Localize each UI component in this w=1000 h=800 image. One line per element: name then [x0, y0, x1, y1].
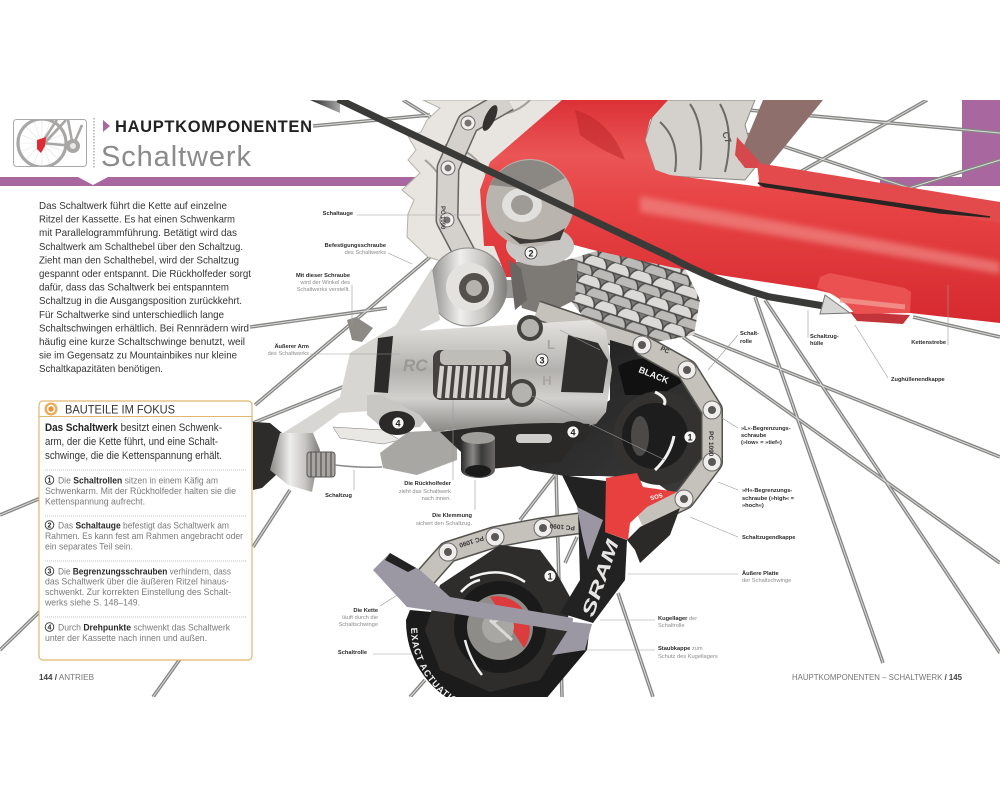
- number badges: 2: [528, 248, 534, 258]
- cage plates: SOS: [649, 491, 663, 500]
- panel: Bauteile im Fokus: [39, 401, 252, 660]
- number badges: 1: [687, 432, 693, 442]
- number badges: 4: [395, 418, 401, 428]
- item 4: 4: [48, 625, 52, 632]
- labels left of illustration: [268, 211, 946, 656]
- intro text block: häufig eine kurze Schaltschwinge benutzt, weil: [39, 337, 245, 348]
- labels right of illustration: Staubkappe zum: [658, 646, 703, 652]
- item 3: werks siehe S. 148–149.: [44, 598, 140, 608]
- panel intro: arm, der die Kette führt, und eine Schalt-: [45, 436, 218, 448]
- limit screws: [517, 315, 543, 341]
- item 2: 2: [48, 523, 52, 530]
- labels right of illustration: der Schaltschwinge: [742, 578, 791, 584]
- labels left of illustration: Befestigungsschraube: [325, 243, 386, 249]
- intro text block: sie im Gegensatz zu Mountainbikes nur kleine: [39, 351, 237, 362]
- number badges: 4: [570, 427, 576, 437]
- labels right of illustration: »L«-Begrenzungs-: [741, 426, 791, 432]
- labels left of illustration: zieht das Schaltwerk: [399, 489, 451, 495]
- labels right of illustration: Schalt-: [740, 331, 759, 337]
- footer left: 144 / ANTRIEB: [39, 673, 94, 682]
- heading: HAUPTKOMPONENTEN: [115, 118, 312, 136]
- upper red stay: [757, 163, 1000, 225]
- cage plates: SRAM: [578, 536, 623, 619]
- lower cage pulley: [406, 545, 590, 705]
- icon: bicycle locator: [14, 118, 86, 168]
- labels right of illustration: [658, 331, 945, 660]
- labels left of illustration: Mit dieser Schraube: [296, 273, 350, 279]
- hanger area shadow: [516, 260, 578, 312]
- lower chain: PC 1090: [707, 431, 714, 457]
- labels left of illustration: Schaltauge: [323, 211, 353, 217]
- item 4: Durch Drehpunkte schwenkt das Schaltwerk: [58, 622, 230, 632]
- item 1: Kettenspannung aufrecht.: [45, 496, 145, 506]
- item 2: Rahmen. Es kann fest am Rahmen angebracht oder: [45, 531, 243, 541]
- footer right: HAUPTKOMPONENTEN – SCHALTWERK / 145: [792, 673, 963, 682]
- dotted divider: [93, 118, 95, 168]
- parallelogram body: [374, 315, 612, 470]
- parallelogram body: RC: [403, 356, 428, 375]
- item 3: schwenkt. Zur korrekten Einstellung des Schalt-: [45, 587, 231, 597]
- labels left of illustration: des Schaltwerks: [345, 250, 386, 256]
- gear cable housing: [310, 99, 824, 306]
- cassette arcs: [424, 100, 531, 176]
- arrow marker: [103, 120, 110, 132]
- cable end cap on chainstay: [817, 273, 911, 324]
- item 3: Die Begrenzungsschrauben verhindern, dass: [58, 566, 231, 576]
- intro text block: dafür, dass das Schaltwerk bei entspanntem: [39, 283, 229, 294]
- labels left of illustration: Schaltzug: [325, 493, 353, 499]
- main illustration: bicycle rear derailleur: [0, 100, 1000, 697]
- panel intro: [45, 422, 222, 462]
- lower chain: PC 1090: [549, 522, 575, 531]
- intro text block: Schaltwerk am Schalthebel über den Schaltzug.: [39, 242, 243, 253]
- parallelogram body: L: [547, 337, 555, 352]
- small cassette sprockets: [560, 250, 700, 345]
- labels right of illustration: Schutz des Kugellagers: [658, 654, 718, 660]
- labels right of illustration: Zughüllenendkappe: [891, 377, 945, 383]
- main illustration: bicycle rear derailleur: C7: [720, 130, 733, 145]
- labels left of illustration: Die Klemmung: [432, 513, 473, 519]
- upper chain run behind body: [537, 310, 642, 345]
- lower chain: PC: [659, 345, 671, 356]
- barrel adjuster: [461, 432, 495, 478]
- big bolt washer: [429, 248, 527, 326]
- labels left of illustration: läuft durch die: [342, 615, 378, 621]
- item 1: Die Schaltrollen sitzen in einem Käfig am: [58, 476, 218, 486]
- dropout disc: [486, 159, 574, 266]
- text on pulley cage: EXACT ACTUATION: [411, 628, 456, 697]
- leader lines: [310, 215, 948, 654]
- intro text block: Schaltkapazitäten benötigen.: [39, 364, 163, 375]
- item 2: ein separates Teil sein.: [45, 542, 133, 552]
- cage plates: [373, 473, 680, 655]
- labels left of illustration: sichert den Schaltzug.: [416, 521, 472, 527]
- labels left of illustration: Schaltwerks verstellt.: [297, 287, 350, 293]
- icon: gear: [44, 402, 58, 416]
- labels left of illustration: des Schaltwerks: [268, 351, 309, 357]
- labels left of illustration: Die Kette: [353, 608, 378, 614]
- item 4: unter der Kassette nach innen und außen.: [45, 633, 207, 643]
- item 1: [45, 476, 236, 506]
- parallelogram body: H: [542, 373, 552, 388]
- seat stay tube: [738, 100, 823, 167]
- intro text block: Zieht man den Schalthebel, wird der Schaltzug: [39, 255, 239, 266]
- silver lobe and lower arm: [333, 392, 457, 475]
- return spring: [433, 350, 511, 400]
- lower chain: PC 1090: [458, 534, 484, 548]
- subtitle: Schaltwerk: [101, 141, 252, 173]
- intro text block: [39, 201, 251, 375]
- dark upper cage and pulley: [520, 340, 701, 492]
- labels right of illustration: hülle: [810, 341, 823, 347]
- panel intro: Das Schaltwerk besitzt einen Schwenk-: [45, 422, 222, 434]
- number badges: 3: [539, 355, 545, 365]
- labels right of illustration: »H«-Begrenzungs-: [742, 488, 792, 494]
- intro text block: mit Parallelogrammführung. Betätigt wird das: [39, 228, 237, 239]
- item 2: [45, 520, 243, 552]
- wheel spokes: [0, 100, 1000, 697]
- intro text block: Ritzel der Kassette. Es hat einen Schwenkarm: [39, 215, 235, 226]
- intro text block: gespannt oder entspannt. Die Rückholfeder sorgt: [39, 269, 251, 280]
- upper chain: PC 1090: [439, 206, 445, 230]
- labels left of illustration: Schaltrolle: [338, 650, 367, 656]
- limit screw assembly: [347, 317, 373, 342]
- labels right of illustration: Kugellager der: [658, 616, 697, 622]
- teeth of mid cassette near seat stay: [645, 100, 757, 180]
- outer arm of derailleur: [283, 268, 440, 433]
- number badges: 1: [547, 571, 553, 581]
- labels right of illustration: Schaltzug-: [810, 334, 839, 340]
- header band: [0, 100, 1000, 186]
- labels right of illustration: Schaltrolle: [658, 623, 685, 629]
- labels left of illustration: Äußerer Arm: [274, 343, 309, 350]
- panel heading: BAUTEILE IM FOKUS: [65, 402, 175, 416]
- intro text block: Das Schaltwerk führt die Kette auf einzelne: [39, 201, 227, 212]
- labels right of illustration: Schaltzugendkappe: [742, 535, 795, 541]
- labels right of illustration: schraube (»high« =: [742, 496, 795, 502]
- intro text block: Für Schaltwerke sind unterschiedlich lange: [39, 310, 224, 321]
- labels left of illustration: Kettenstrebe: [911, 340, 946, 346]
- item 1: 1: [48, 478, 52, 485]
- clamp bolt housing: [253, 422, 382, 492]
- item 2: Das Schaltauge befestigt das Schaltwerk am: [58, 520, 229, 530]
- labels left of illustration: Schaltschwinge: [338, 622, 378, 628]
- lower chain: [425, 336, 721, 578]
- item 3: 3: [48, 569, 52, 576]
- upper chain: [439, 100, 508, 260]
- labels left of illustration: wird der Winkel des: [299, 280, 350, 286]
- red frame and chainstay: [480, 100, 1000, 323]
- item 3: das Schaltwerk über die äußeren Ritzel hinaus-: [45, 576, 229, 586]
- intro text block: Schaltzug in die Ausgangsposition zurückkehrt.: [39, 296, 242, 307]
- cassette: large white sprocket: [402, 100, 570, 270]
- labels right of illustration: rolle: [740, 339, 752, 345]
- item 3: [44, 566, 231, 608]
- item 1: Schwenkarm. Mit der Rückholfeder halten sie die: [45, 486, 236, 496]
- labels left of illustration: nach innen.: [422, 496, 451, 502]
- labels left of illustration: Die Rückholfeder: [404, 481, 452, 487]
- number badges: [379, 247, 696, 582]
- labels right of illustration: Äußere Platte: [742, 570, 779, 577]
- labels right of illustration: schraube: [741, 433, 766, 439]
- labels right of illustration: »hoch«): [742, 503, 764, 509]
- labels right of illustration: (»low« = »tief«): [741, 440, 782, 446]
- panel intro: schwinge, die die Kettenspannung erhält.: [45, 450, 222, 462]
- dark upper cage and pulley: BLACK: [637, 365, 671, 386]
- item 4: [45, 622, 230, 643]
- intro text block: Schaltschwingen erhältlich. Bei Rennrädern wird: [39, 323, 249, 334]
